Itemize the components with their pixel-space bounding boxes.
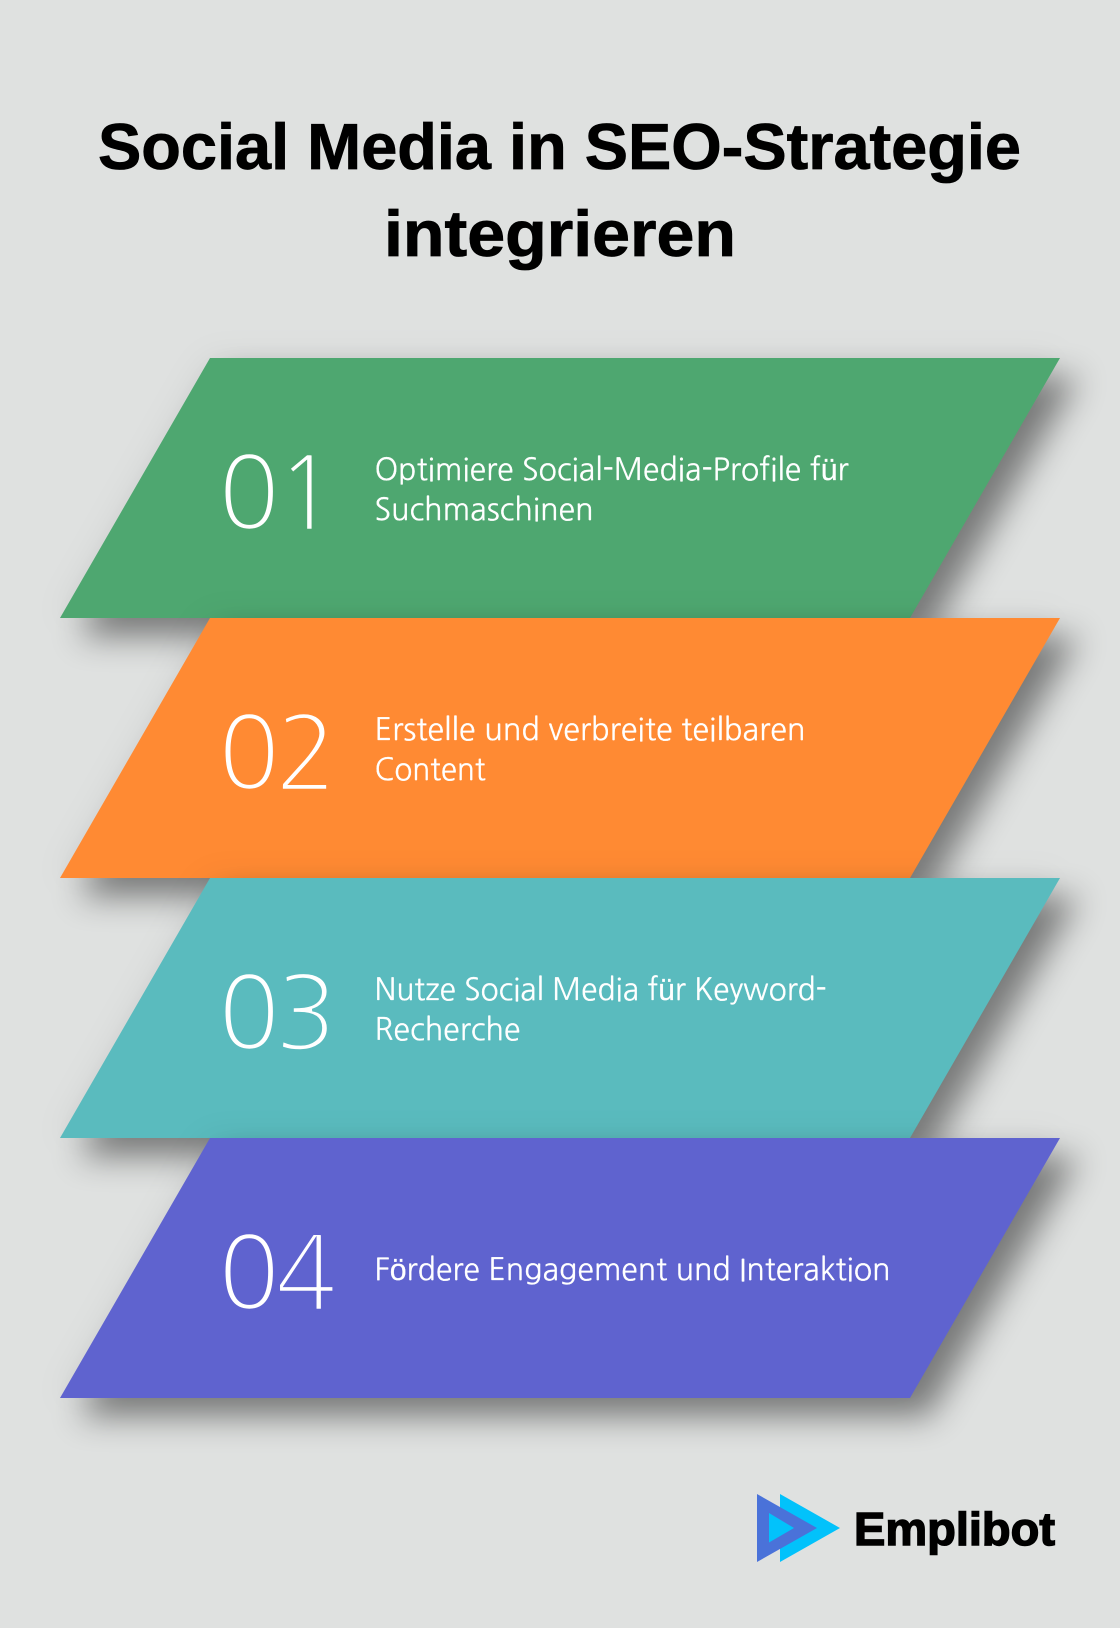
shape: orange parallelogram <box>60 618 1060 878</box>
panel: step 03 <box>60 878 1060 1138</box>
text: step 01 description: Suchmaschinen <box>374 494 594 525</box>
text: step 02 description <box>374 714 806 785</box>
number: 04: 04 <box>218 1222 334 1324</box>
icon: play triangles <box>757 1494 840 1562</box>
number: 02: 02 <box>218 702 333 804</box>
text: step 03 description: Nutze Social Media für Keyword- <box>374 974 826 1005</box>
wordmark: Emplibot <box>854 1503 1055 1555</box>
text: step 03 description <box>374 974 826 1045</box>
logo: Emplibot <box>757 1494 1055 1562</box>
text: step 03 description: Recherche <box>374 1014 520 1045</box>
shape: green parallelogram <box>60 358 1060 618</box>
title: integrieren <box>384 197 736 270</box>
shape: teal parallelogram <box>60 878 1060 1138</box>
shape: indigo parallelogram <box>60 1138 1060 1398</box>
text: step 04 description: Fördere Engagement und Interaktion <box>374 1254 890 1285</box>
text: step 02 description: Content <box>374 754 486 785</box>
text: step 01 description <box>374 454 849 525</box>
text: step 01 description: Optimiere Social-Media-Profile für <box>374 454 849 485</box>
text: step 02 description: Erstelle und verbreite teilbaren <box>374 714 806 745</box>
panel: step 01 <box>60 358 1060 618</box>
panel: step 02 <box>60 618 1060 878</box>
number: 03: 03 <box>218 962 333 1064</box>
number: 01: 01 <box>218 442 333 544</box>
title <box>98 110 1021 270</box>
panel: step 04 <box>60 1138 1060 1398</box>
title: Social Media in SEO-Strategie <box>98 110 1021 183</box>
